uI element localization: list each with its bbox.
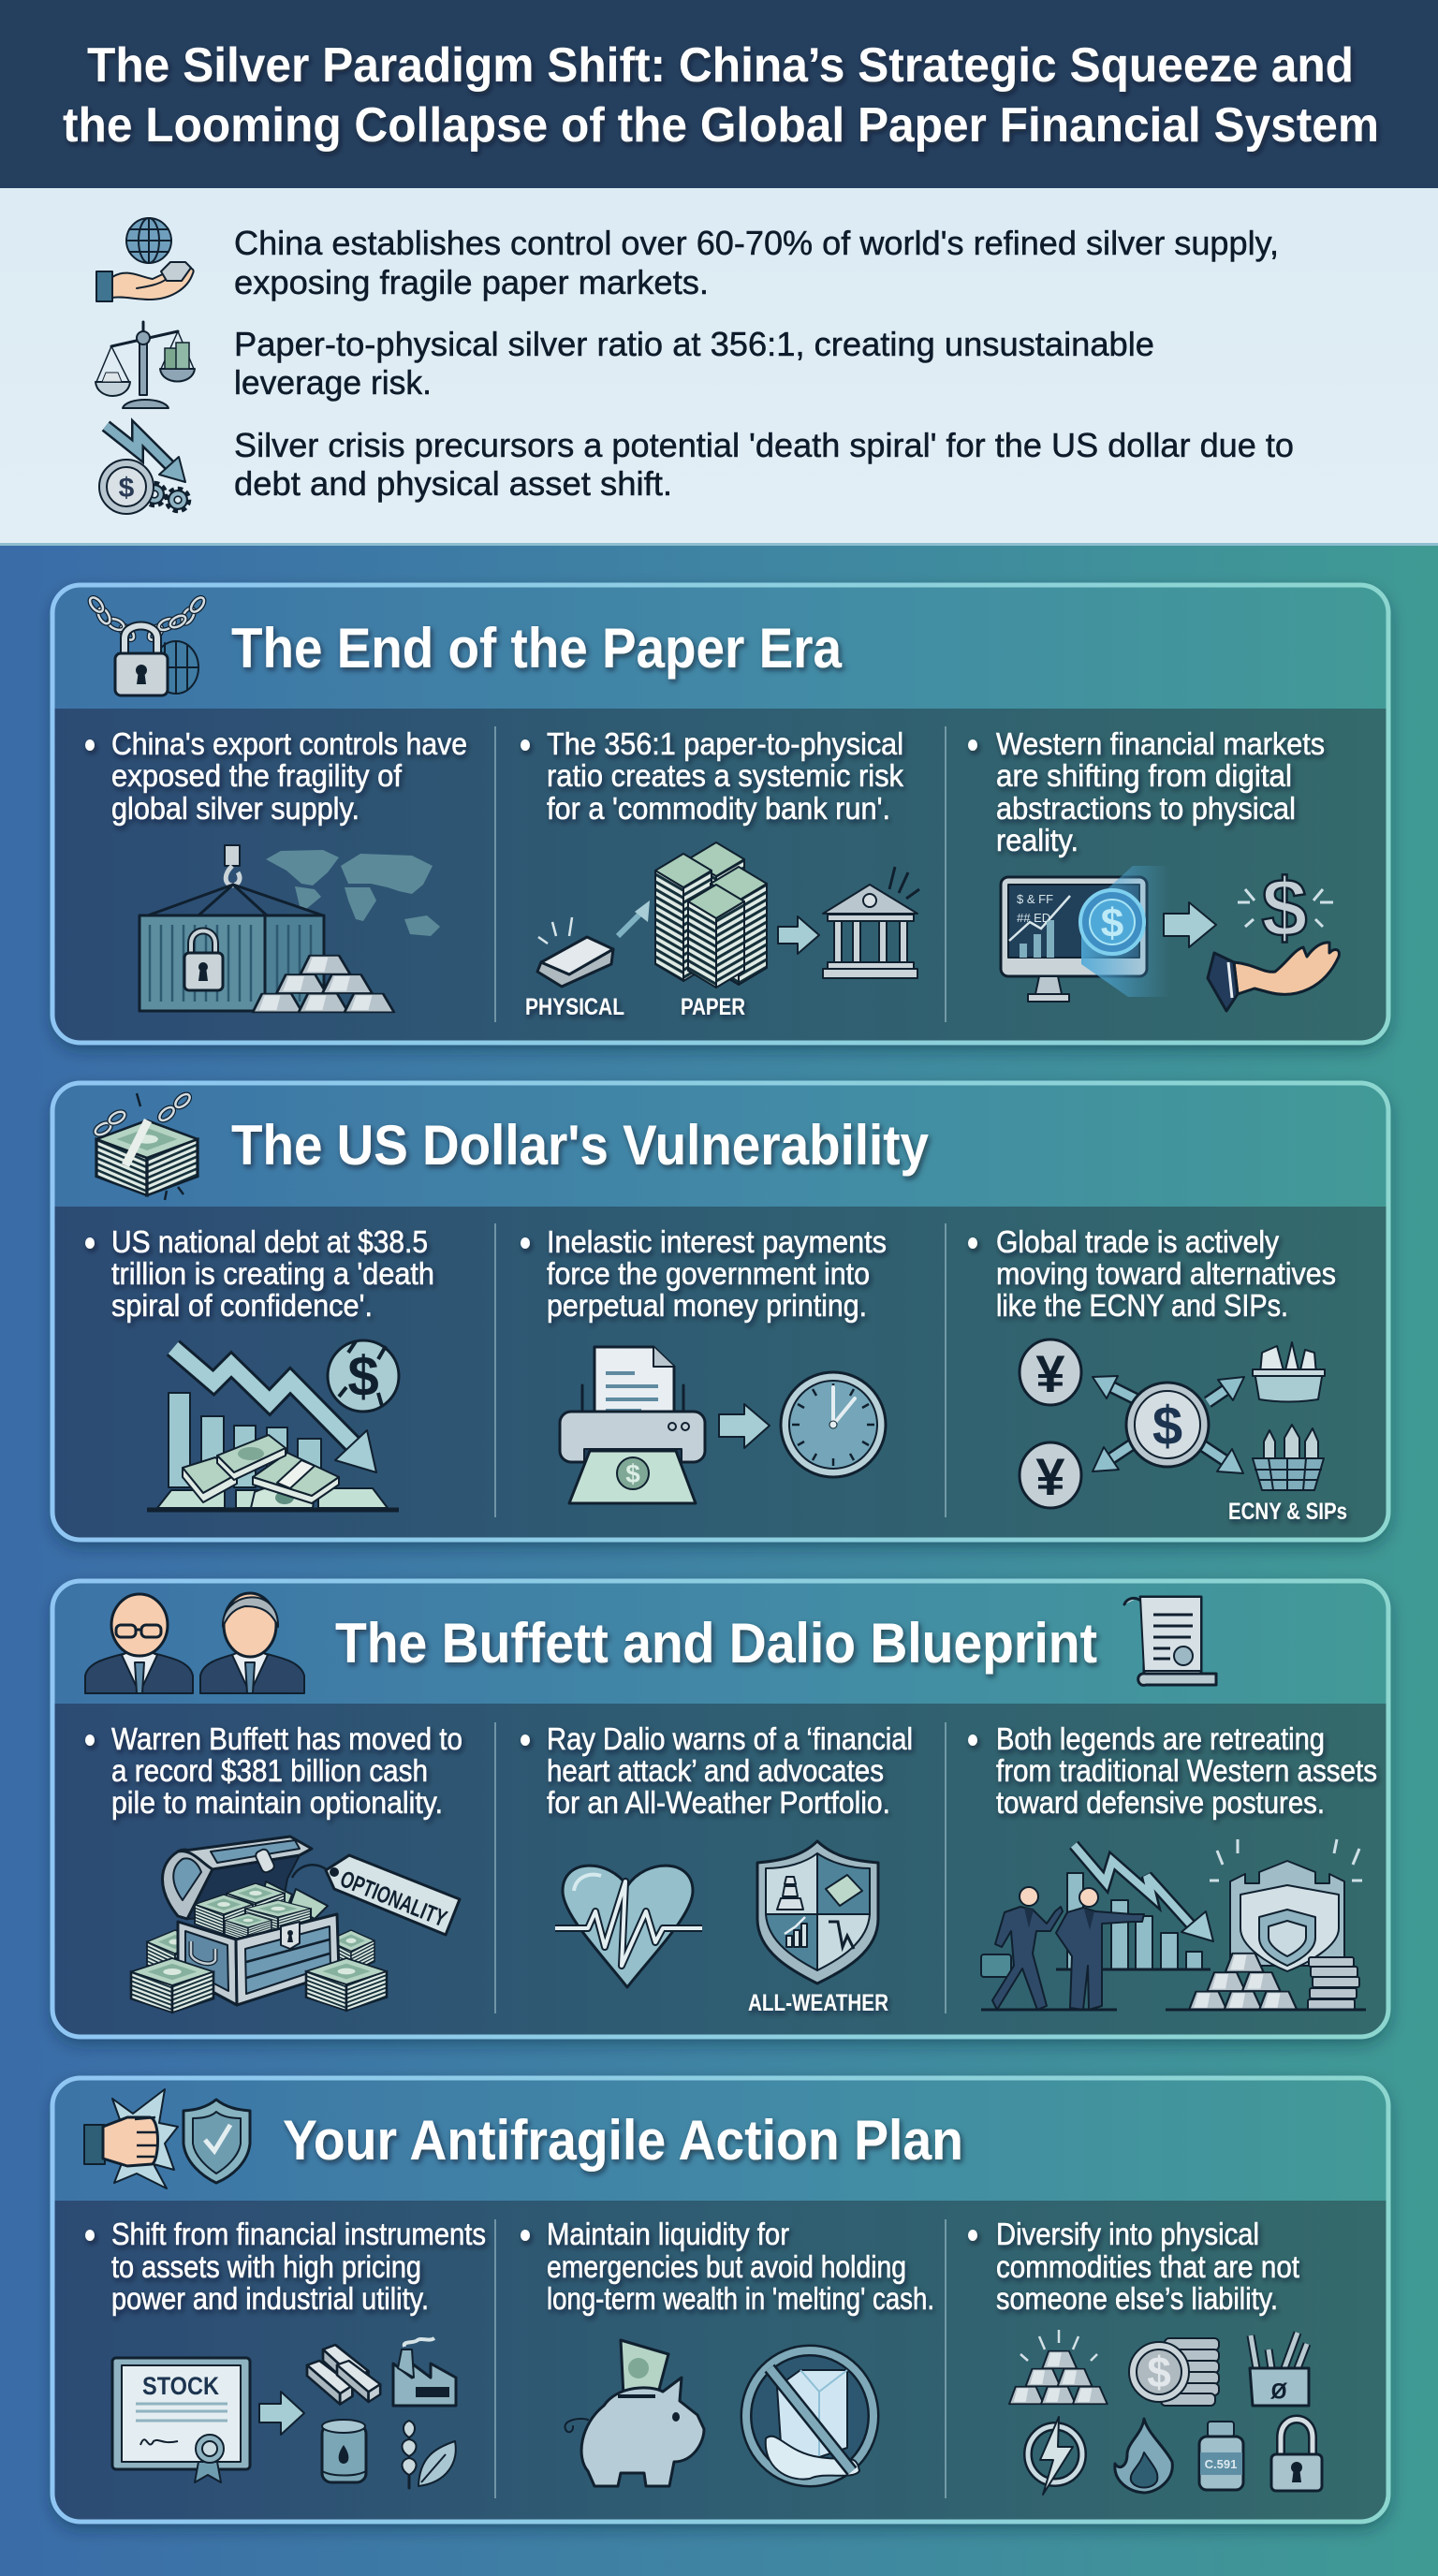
icon: silver ingot	[537, 937, 613, 987]
illustration: piggy bank and no melting cash	[565, 2340, 873, 2486]
text: key takeaways: leverage risk.	[234, 363, 432, 402]
illustration: trade moving to alternatives: $	[1152, 1396, 1182, 1456]
illustration: physical vs paper ratio: PAPER	[681, 994, 745, 1020]
text: column 3: Diversify into physical	[996, 2217, 1259, 2251]
text: column 3: someone else’s liability.	[996, 2281, 1278, 2316]
icon: Dalio portrait	[200, 1593, 304, 1693]
panel: Your Antifragile Action Plan	[52, 2078, 1388, 2522]
icon: yuan coin top	[1020, 1339, 1081, 1405]
icon: basket bottom	[1253, 1425, 1324, 1490]
heading: The End of the Paper Era	[231, 617, 843, 680]
icon: oil barrel	[322, 2420, 366, 2482]
illustration: printer and clock: $	[625, 1459, 640, 1488]
icon: medicine bottle: C.591	[1205, 2457, 1237, 2471]
text: column 1: spiral of confidence'.	[111, 1288, 373, 1323]
icon: bank	[823, 867, 919, 978]
illustration: digital to physical: $	[1101, 900, 1123, 946]
text: column 2: long-term wealth in 'melting' cash.	[547, 2281, 934, 2316]
text: column 2: emergencies but avoid holding	[547, 2249, 906, 2284]
text: key takeaways: China establishes control over 60-70% of world's refined silver supply,	[234, 224, 1279, 262]
label: ECNY & SIPs	[1228, 1499, 1347, 1525]
illustration: digital to physical: $	[1262, 861, 1307, 954]
icon: flame	[1115, 2419, 1172, 2493]
illustration: trade moving to alternatives	[1020, 1339, 1347, 1525]
text: column 1: Shift from financial instruments	[111, 2217, 486, 2251]
icon: silver bars	[307, 2345, 380, 2405]
title: The Silver Paradigm Shift: China’s Strategic Squeeze and	[87, 38, 1354, 93]
text: key takeaways: exposing fragile paper markets.	[234, 263, 709, 301]
icon: piggy bank	[565, 2340, 704, 2486]
illustration: treasure chest of cash with optionality tag	[131, 1837, 460, 2012]
icon: clock	[781, 1372, 886, 1477]
arrows around dollar	[1093, 1376, 1244, 1473]
text: column 3: from traditional Western assets	[996, 1753, 1377, 1788]
text: key takeaways: Silver crisis precursors a potential 'death spiral' for the US dollar due to	[234, 426, 1294, 464]
text: column 2: for a 'commodity bank run'.	[547, 791, 890, 826]
icon: yuan coin top: ¥	[1035, 1344, 1065, 1403]
cash inside chest	[195, 1881, 328, 1941]
title	[63, 38, 1379, 153]
text: column 1: a record $381 billion cash	[111, 1753, 428, 1788]
text: column 3: abstractions to physical	[996, 791, 1296, 826]
icon: raw materials bucket	[1250, 2333, 1309, 2406]
icon: medicine bottle	[1199, 2422, 1243, 2490]
text: column 3: toward defensive postures.	[996, 1785, 1325, 1820]
icon: basket top	[1253, 1342, 1325, 1402]
tag: optionality: OPTIONALITY	[336, 1866, 450, 1932]
heading: The US Dollar's Vulnerability	[231, 1114, 930, 1177]
text: column 1: global silver supply.	[111, 791, 360, 826]
text: column 2: heart attack’ and advocates	[547, 1753, 884, 1788]
text: column 2: Inelastic interest payments	[547, 1224, 887, 1259]
text: column 1: pile to maintain optionality.	[111, 1785, 443, 1820]
text: column 2: Maintain liquidity for	[547, 2217, 789, 2251]
chest box	[178, 1914, 339, 2005]
icon: Buffett portrait	[85, 1594, 193, 1693]
icon: globe and hand holding silver	[96, 218, 194, 301]
text: column 1: US national debt at $38.5	[111, 1224, 428, 1259]
panel: The US Dollar's Vulnerability	[52, 1083, 1388, 1540]
illustration: physical vs paper ratio	[525, 842, 919, 1020]
icon: balance scale	[95, 322, 195, 408]
text: column 2: The 356:1 paper-to-physical	[547, 726, 903, 761]
heading: The Buffett and Dalio Blueprint	[335, 1612, 1097, 1675]
title banner	[0, 0, 1438, 188]
icon: yuan coin bottom: ¥	[1035, 1447, 1065, 1506]
illustration: digital to physical: ## ED	[1017, 911, 1050, 925]
illustration: heart and all-weather shield	[555, 1841, 888, 2016]
icon: two businessmen	[981, 1887, 1144, 2010]
icon: shield quadrant	[757, 1841, 878, 1983]
text: column 3: moving toward alternatives	[996, 1256, 1336, 1291]
text: column 3: commodities that are not	[996, 2249, 1299, 2284]
text: column 1: to assets with high pricing	[111, 2249, 421, 2284]
text: column 2	[521, 726, 903, 826]
text: column 1: power and industrial utility.	[111, 2281, 429, 2316]
icon: prohibited melting ice	[746, 2350, 873, 2481]
label: ALL-WEATHER	[748, 1990, 888, 2016]
text: column 3	[968, 1721, 1377, 1820]
text: column 3: Both legends are retreating	[996, 1721, 1325, 1756]
labels: PHYSICAL	[525, 994, 624, 1020]
text: key takeaways: Paper-to-physical silver ratio at 356:1, creating unsustainable	[234, 325, 1154, 363]
icon: cash stack with broken chain	[94, 1091, 198, 1200]
text: column 2	[521, 1224, 887, 1323]
icon: fist breaking through and shield	[84, 2089, 250, 2188]
icon: falling arrow, coin and gears	[99, 426, 187, 514]
text: column 2: ratio creates a systemic risk	[547, 758, 903, 793]
text: column 1: China's export controls have	[111, 726, 467, 761]
text: column 1	[85, 1224, 434, 1323]
icon: padlock	[1271, 2419, 1322, 2491]
chest lid and interior	[163, 1837, 312, 1919]
text: column 1: trillion is creating a 'death	[111, 1256, 434, 1291]
icon: scroll document	[1124, 1597, 1216, 1685]
text: column 1	[85, 2217, 486, 2316]
text: column 1: exposed the fragility of	[111, 758, 403, 793]
title: the Looming Collapse of the Global Paper Financial System	[63, 98, 1379, 153]
illustration: legends retreating to defensive assets	[981, 1839, 1366, 2010]
text: key takeaways	[234, 224, 1294, 503]
text: column 3: Western financial markets	[996, 726, 1325, 761]
text: column 2: Ray Dalio warns of a ‘financial	[547, 1721, 913, 1756]
icon: falling arrow, coin and gears: $	[119, 473, 135, 504]
illustration: digital to physical	[1001, 861, 1339, 1011]
icon: stock certificate	[112, 2358, 250, 2482]
text: column 1: Warren Buffett has moved to	[111, 1721, 462, 1756]
tag: optionality	[292, 1855, 460, 1935]
icon: heart	[555, 1866, 702, 1987]
text: column 3: reality.	[996, 823, 1078, 857]
illustration: printer and clock	[560, 1347, 886, 1503]
text: column 3	[968, 2217, 1299, 2316]
heading: Your Antifragile Action Plan	[283, 2109, 963, 2172]
text: column 3: like the ECNY and SIPs.	[996, 1288, 1288, 1323]
panel: The End of the Paper Era	[52, 585, 1388, 1043]
cash pile	[157, 1435, 388, 1508]
illustration: digital to physical: $ & FF	[1017, 892, 1053, 906]
text: column 2	[521, 2217, 934, 2316]
tall paper stacks	[655, 842, 767, 988]
text: column 3: are shifting from digital	[996, 758, 1292, 793]
icon: open hand	[1208, 943, 1339, 1011]
text: column 2	[521, 1721, 913, 1820]
icon: raw materials bucket: ø	[1270, 2374, 1287, 2405]
illustration: stock to real assets	[112, 2338, 456, 2488]
panel: key takeaways	[0, 188, 1438, 546]
illustration: container, map and silver	[139, 845, 440, 1012]
icon: stock certificate: STOCK	[142, 2372, 219, 2400]
icon: energy bolt	[1028, 2417, 1082, 2495]
icon: padlock, chains and globe	[87, 595, 207, 695]
text: column 3	[968, 726, 1325, 857]
icon: silver bar pyramid	[1009, 2330, 1108, 2404]
text: column 3	[968, 1224, 1336, 1323]
illustration: physical commodities grid	[1009, 2330, 1322, 2495]
text: column 1	[85, 726, 467, 826]
illustration: falling chart, cracked dollar, cash pile: $	[347, 1345, 379, 1408]
icon: fortress shield, ingots and coins	[1166, 1839, 1366, 2010]
text: key takeaways: debt and physical asset shift.	[234, 464, 672, 503]
icon: factory	[393, 2338, 456, 2406]
panel: The Buffett and Dalio Blueprint	[52, 1581, 1388, 2037]
text: column 3: Global trade is actively	[996, 1224, 1279, 1259]
icon: coin stack	[1129, 2338, 1219, 2406]
icon: wheat and leaf	[402, 2421, 456, 2488]
illustration: falling chart, cracked dollar, cash pile	[147, 1340, 399, 1510]
text: column 1	[85, 1721, 462, 1820]
icon: coin stack: $	[1147, 2348, 1171, 2396]
text: column 2: force the government into	[547, 1256, 870, 1291]
text: column 2: perpetual money printing.	[547, 1288, 867, 1323]
icon: yuan coin bottom	[1020, 1442, 1081, 1508]
text: column 2: for an All-Weather Portfolio.	[547, 1785, 890, 1820]
